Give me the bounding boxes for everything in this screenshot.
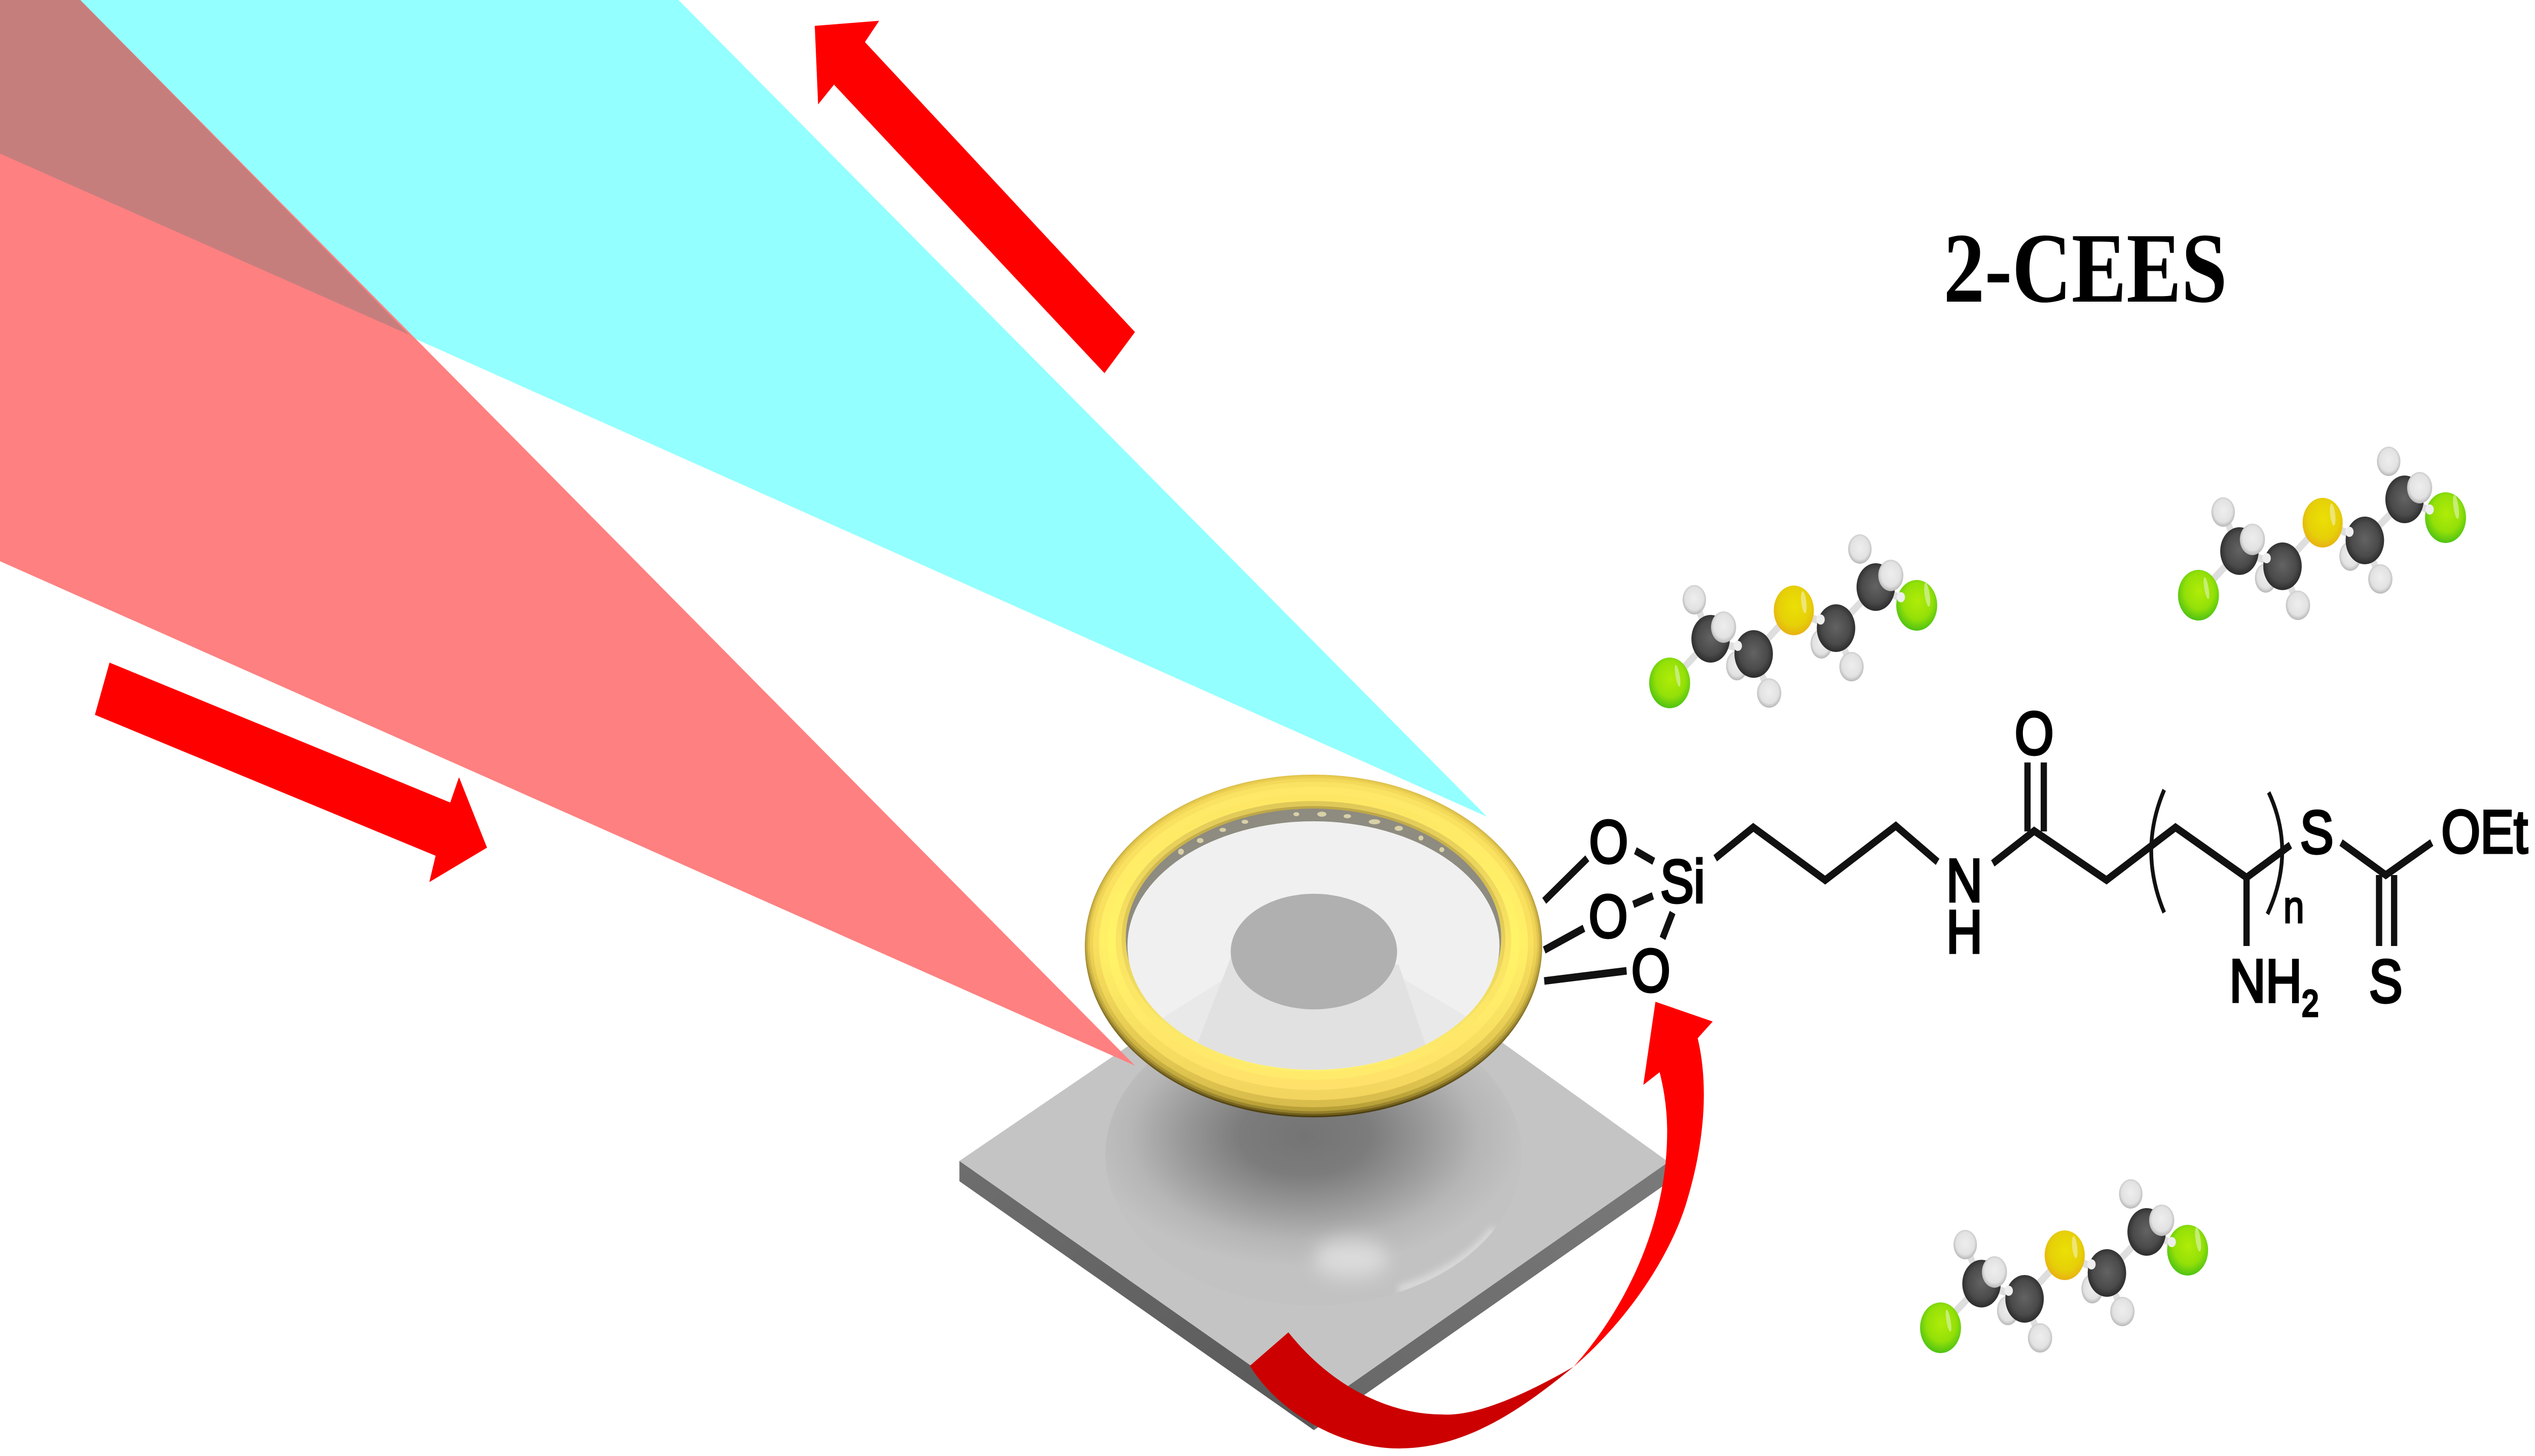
substrate plate xyxy=(959,914,1669,1430)
atom labels: O xyxy=(1589,883,1627,951)
ring inner wall xyxy=(1126,809,1501,1067)
cyan reflected beam xyxy=(0,0,1487,817)
atom labels: n xyxy=(2284,882,2304,933)
atom labels: O xyxy=(1632,937,1671,1005)
beam overlap region xyxy=(0,0,409,335)
atom labels: S xyxy=(2369,948,2403,1015)
molecule: 2-CEES bottom xyxy=(1920,1179,2208,1353)
dome bulge on substrate xyxy=(1109,1065,1500,1292)
atom labels: Si xyxy=(1660,848,1705,916)
central disk xyxy=(1230,894,1397,1009)
incident beam arrow xyxy=(95,663,487,882)
gold ring xyxy=(1085,775,1542,1117)
arrow tail ribbon xyxy=(1250,1332,1574,1448)
reflected beam arrow xyxy=(815,21,1135,373)
curved red arrow xyxy=(1250,1002,1713,1448)
title: 2-CEES: 2-CEES xyxy=(1943,213,2227,324)
chemical structure: silane linked polymer xyxy=(1544,700,2528,1024)
atom labels: 2 xyxy=(2302,983,2319,1024)
atom labels: O xyxy=(2015,700,2054,768)
gold ring and disk structure xyxy=(1085,775,1542,1117)
molecule: 2-CEES upper left xyxy=(1649,534,1937,708)
atom labels: S xyxy=(2300,798,2334,866)
arrow head ribbon xyxy=(1574,1002,1713,1367)
bonds xyxy=(1544,762,2432,981)
atom labels: N xyxy=(1946,847,1982,915)
atom labels xyxy=(1589,700,2528,1024)
atom labels: OEt xyxy=(2441,798,2528,866)
cone seen through the interior xyxy=(1163,958,1466,1070)
atom labels: O xyxy=(1589,808,1628,876)
molecule: 2-CEES upper right xyxy=(2178,447,2466,621)
red incident beam xyxy=(0,0,1135,1066)
atom labels: H xyxy=(1946,898,1982,966)
atom labels: NH xyxy=(2229,947,2302,1015)
transparent interior xyxy=(1128,821,1500,1070)
